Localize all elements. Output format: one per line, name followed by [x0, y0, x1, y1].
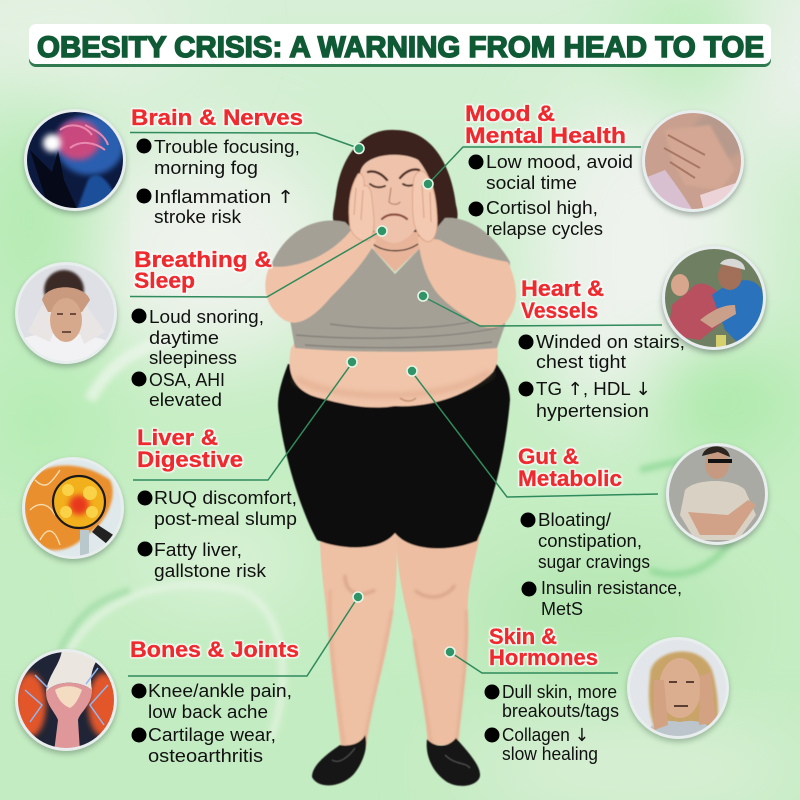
panel: skin and hormones: [484, 624, 729, 764]
icon: fatty liver under magnifier: [20, 455, 126, 562]
panel: brain and nerves: [20, 105, 303, 227]
panel: breathing and sleep: [15, 247, 272, 410]
heading: [465, 101, 626, 148]
right arm: [418, 236, 516, 328]
bullets: [138, 488, 297, 581]
bullets: slow healing: [502, 744, 598, 764]
bullets: Knee/ankle pain,: [148, 681, 292, 701]
navel: [400, 398, 416, 401]
icon: inflamed knee joint: [14, 650, 120, 754]
leader lines and body markers: [128, 132, 662, 676]
bullets: TG ↑, HDL ↓: [536, 379, 651, 400]
heading: Metabolic: [518, 466, 622, 491]
panel: heart and vessels: [518, 245, 770, 421]
icon: hand over face: [640, 110, 748, 216]
bullets: relapse cycles: [486, 219, 603, 239]
bullets: hypertension: [536, 401, 649, 421]
icon: glowing brain: [20, 105, 130, 215]
bullets: Insulin resistance,: [541, 578, 682, 598]
bullets: daytime: [149, 328, 219, 348]
heading: Liver &: [137, 425, 218, 450]
bullets: Cartilage wear,: [148, 725, 276, 745]
heading: [137, 425, 243, 472]
bullets: Cortisol high,: [486, 198, 598, 218]
legs: [320, 525, 480, 748]
bullets: RUQ discomfort,: [154, 488, 297, 508]
heading: Breathing &: [134, 247, 272, 272]
shirt: [270, 218, 510, 352]
bullets: gallstone risk: [154, 561, 267, 581]
bullets: MetS: [541, 599, 583, 619]
bullets: Bloating/: [538, 510, 611, 530]
icon: worried woman: [627, 637, 729, 745]
left arm: [265, 226, 376, 323]
belly shading: [296, 372, 490, 396]
bullets: sugar cravings: [538, 552, 650, 572]
heading: Hormones: [489, 645, 598, 670]
title: OBESITY CRISIS: A WARNING FROM HEAD TO TOE: [37, 31, 764, 64]
fringe: [356, 133, 432, 182]
bullets: osteoarthritis: [148, 746, 263, 766]
heading: [518, 444, 622, 491]
bullets: elevated: [149, 390, 222, 410]
shorts: [278, 362, 510, 548]
heading: Mood &: [465, 101, 555, 126]
bullets: Trouble focusing,: [154, 137, 300, 157]
bullets: social time: [486, 173, 577, 193]
heading: Digestive: [137, 447, 243, 472]
face: [360, 155, 430, 243]
icon: older couple, chest pain: [660, 245, 770, 357]
bullets: Collagen ↓: [502, 725, 589, 746]
bullets: breakouts/tags: [502, 701, 619, 721]
heading: Brain & Nerves: [131, 105, 303, 130]
heading: Skin &: [489, 624, 557, 649]
bullets: Dull skin, more: [502, 682, 617, 702]
bullets: morning fog: [154, 158, 258, 178]
bullets: [520, 510, 682, 619]
bullets: low back ache: [148, 702, 268, 722]
bullets: chest tight: [536, 352, 626, 372]
icon: woman awake in bed: [15, 262, 117, 367]
facial features: [368, 169, 419, 219]
heading: Mental Health: [465, 123, 626, 148]
panel: mood and mental health: [465, 101, 748, 239]
panel: gut and metabolic: [518, 443, 768, 619]
heading: [134, 247, 272, 293]
panel: bones and joints: [14, 637, 299, 766]
icon: man holding stomach: [666, 443, 768, 548]
necklace: [373, 244, 418, 251]
heading: Bones & Joints: [130, 637, 299, 662]
bullets: post-meal slump: [154, 509, 297, 529]
heading: [521, 276, 604, 323]
heading: Sleep: [134, 268, 195, 293]
bullets: Fatty liver,: [154, 540, 242, 560]
bullets: Winded on stairs,: [536, 332, 685, 352]
shoes: [312, 735, 480, 786]
neck: [368, 232, 420, 272]
bullets: [132, 307, 264, 410]
heading: Gut &: [518, 444, 579, 469]
panel: liver and digestive: [20, 425, 297, 581]
figure: woman in gray shirt and black shorts: [265, 130, 516, 786]
bullets: constipation,: [538, 531, 642, 551]
bullets: Inflammation ↑: [154, 187, 294, 208]
bullets: [136, 137, 300, 227]
heading: Vessels: [521, 298, 598, 323]
belly: [290, 342, 498, 407]
bullets: Low mood, avoid: [486, 152, 633, 172]
heading: [489, 624, 598, 670]
bullets: Loud snoring,: [149, 307, 264, 327]
bullets: stroke risk: [154, 207, 242, 227]
bullets: [484, 682, 619, 764]
title banner: [29, 24, 771, 67]
bullets: [132, 681, 292, 766]
bullets: OSA, AHI: [149, 370, 225, 390]
heading: Heart &: [521, 276, 604, 301]
left hand: [349, 174, 374, 241]
shirt hem folds: [296, 322, 497, 348]
bullets: [468, 152, 633, 239]
right hand: [412, 171, 437, 242]
bullets: [518, 332, 685, 421]
hair: [333, 130, 458, 245]
bullets: sleepiness: [149, 348, 237, 368]
